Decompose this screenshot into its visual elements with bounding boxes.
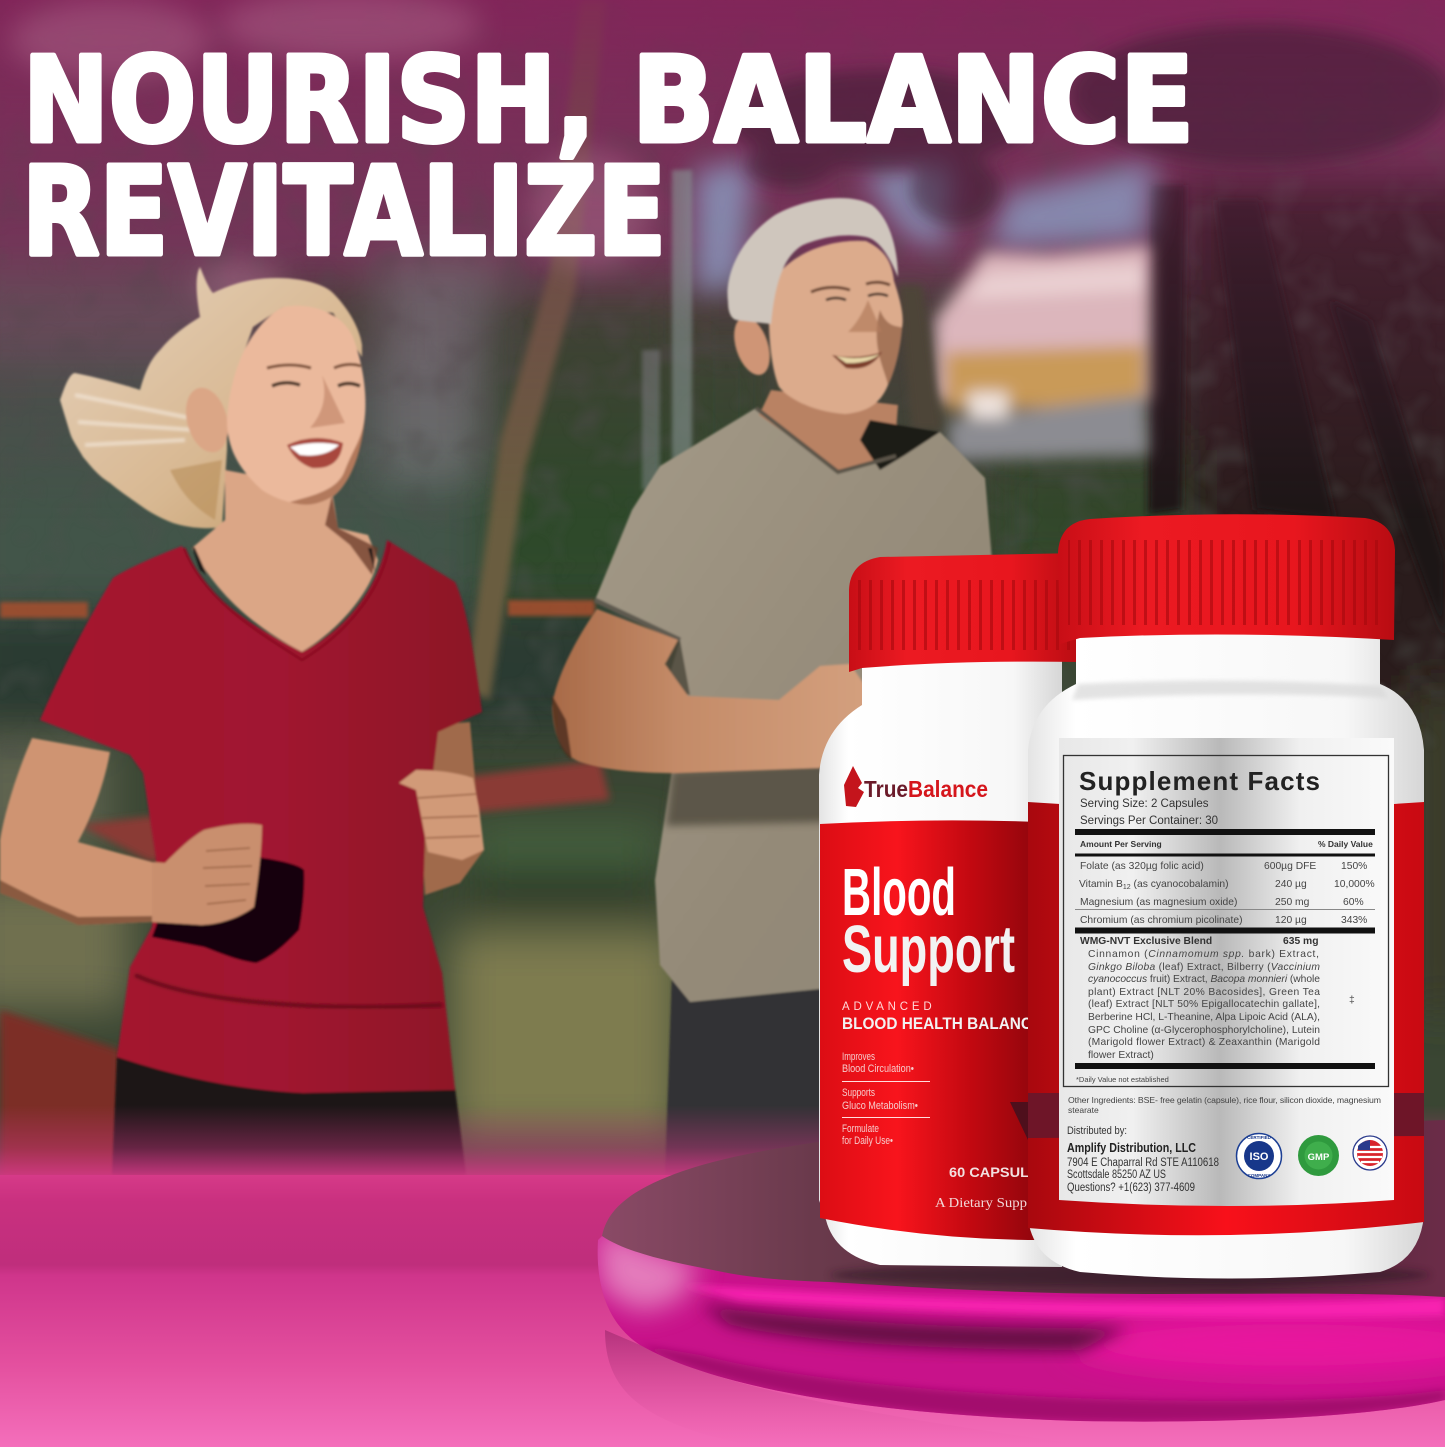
- woman left fist: [152, 824, 262, 925]
- right bottle body: [1028, 632, 1424, 1278]
- distributor info: Distributed by:: [1067, 1125, 1127, 1137]
- product name: [842, 855, 1015, 987]
- woman nose: [310, 375, 345, 428]
- left bottle: [819, 553, 1080, 1267]
- distributor info: Questions? +1(623) 377-4609: [1067, 1182, 1195, 1194]
- ISO badge: CERTIFIED: [1247, 1135, 1272, 1140]
- ISO badge: COMPANY: [1248, 1173, 1270, 1178]
- heading word balance: BALANCE: [632, 31, 1194, 169]
- nutrient rows: 12: [1123, 884, 1131, 891]
- benefits list: for Daily Use•: [842, 1135, 893, 1147]
- exclusive blend: plant) Extract [NLT 20% Bacosides], Green Tea: [1088, 987, 1320, 998]
- exclusive blend: (leaf) Extract [NLT 50% Epigallocatechin gallate],: [1088, 999, 1320, 1010]
- podium top: [602, 1120, 1445, 1297]
- distributor info: [1067, 1125, 1219, 1194]
- serving info: [1080, 798, 1218, 827]
- benefits list: [842, 1051, 930, 1147]
- woman right arm: [420, 722, 484, 895]
- pink fade over photo: [0, 1105, 1445, 1176]
- supplement facts title: Supplement Facts: [1079, 766, 1320, 796]
- exclusive blend: Ginkgo Biloba (leaf) Extract, Bilberry (Vaccinium: [1088, 962, 1320, 973]
- dark band: [1028, 1093, 1424, 1138]
- distributor info: Scottsdale 85250 AZ US: [1067, 1169, 1166, 1181]
- woman hair: [60, 267, 362, 528]
- heading: [22, 31, 1194, 283]
- other ingredients: [1068, 1095, 1381, 1115]
- woman shadow on face: [290, 415, 365, 505]
- nutrient rows: 60%: [1343, 897, 1364, 908]
- woman face: [227, 306, 365, 504]
- woman hand shadow: [152, 857, 304, 963]
- woman shirt fold: [135, 975, 442, 1007]
- podium side: [598, 1236, 1445, 1422]
- dark ribbon: [1010, 1102, 1040, 1150]
- table header: % Daily Value: [1318, 839, 1373, 849]
- brand logo: [844, 766, 988, 807]
- GMP badge: GMP: [1308, 1152, 1330, 1163]
- man t-shirt: [595, 408, 1000, 1002]
- nutrient rows: 343%: [1341, 915, 1367, 926]
- GMP badge: [1298, 1135, 1339, 1176]
- benefits list: Improves: [842, 1051, 875, 1063]
- exclusive blend: WMG-NVT Exclusive Blend: [1080, 936, 1212, 947]
- man under-arm shadow: [666, 762, 830, 826]
- poles and fence: [0, 350, 660, 618]
- man smile: [832, 352, 882, 369]
- woman pants: [112, 1057, 466, 1175]
- man ear: [728, 313, 776, 379]
- woman hair strands: [75, 395, 200, 445]
- pink tree highlights: [10, 0, 650, 310]
- woman right fist: [399, 770, 484, 860]
- other ingredients: stearate: [1068, 1105, 1099, 1115]
- exclusive blend: flower Extract): [1088, 1050, 1154, 1061]
- benefits list: Blood Circulation•: [842, 1063, 914, 1075]
- right bottle red wrap: [1028, 802, 1424, 1235]
- left bottle body: [819, 660, 1062, 1267]
- sky patch: [695, 160, 1155, 295]
- white label panel: [1059, 738, 1394, 1206]
- daily value footnote: *Daily Value not established: [1076, 1075, 1169, 1084]
- benefits list: Gluco Metabolism•: [842, 1100, 918, 1112]
- other ingredients: Other Ingredients: BSE- free gelatin (capsule), rice flour, silicon dioxide, magnesium: [1068, 1095, 1381, 1105]
- woman sports bra strap: [192, 546, 375, 575]
- tree trunk behind man: [898, 285, 942, 430]
- woman collar seam: [184, 542, 390, 660]
- woman left arm: [0, 738, 165, 925]
- logo mark: [844, 766, 864, 807]
- woman brows and eyes: [267, 364, 361, 368]
- benefits list: Supports: [842, 1087, 875, 1099]
- nutrient rows: 250 mg: [1275, 897, 1310, 908]
- heading word nourish: NOURISH,: [23, 31, 595, 169]
- woman red shirt: [40, 540, 482, 1093]
- USA flag badge: [1353, 1136, 1387, 1170]
- exclusive blend: 635 mg: [1283, 936, 1318, 947]
- table header: Amount Per Serving: [1080, 839, 1162, 849]
- nutrient rows: 120 µg: [1275, 915, 1307, 926]
- foliage texture: [0, 0, 1445, 760]
- running track: [80, 760, 610, 862]
- exclusive blend: (Marigold flower Extract) & Zeaxanthin (Marigold: [1088, 1037, 1320, 1048]
- dietary supplement note: A Dietary Supp: [935, 1196, 1027, 1211]
- tree canopy dark leaves: [730, 25, 1445, 225]
- man neck: [759, 390, 898, 470]
- man legs: [665, 972, 835, 1175]
- podium: [596, 1120, 1445, 1447]
- man hair: [728, 198, 898, 324]
- product name: Support: [842, 912, 1015, 987]
- man nose: [848, 300, 882, 332]
- man collar: [756, 408, 896, 472]
- nutrient rows: 240 µg: [1275, 879, 1307, 890]
- left bottle label: [820, 820, 1040, 1240]
- serving info: Servings Per Container: 30: [1080, 815, 1218, 827]
- exclusive blend: Berberine HCl, L-Theanine, Alpa Lipoic Acid (ALA),: [1088, 1012, 1320, 1023]
- nutrient rows: Folate (as 320µg folic acid): [1080, 861, 1204, 872]
- bottle contact shadow: [830, 1263, 1430, 1287]
- man figure: [552, 198, 1000, 1175]
- nutrient rows: 10,000%: [1334, 879, 1375, 890]
- woman neck and chest: [192, 470, 378, 652]
- benefits list: Formulate: [842, 1123, 879, 1135]
- woman ear: [179, 383, 235, 457]
- brand name: TrueBalance: [864, 776, 988, 802]
- shoulder shading: [1072, 680, 1388, 700]
- magenta top overlay: [0, 0, 1445, 520]
- nutrient rows: Vitamin B: [1079, 879, 1123, 890]
- right bottle: [1028, 514, 1424, 1278]
- product tagline: BLOOD HEALTH BALANC: [842, 1014, 1032, 1033]
- tree trunks: [465, 0, 1445, 700]
- light pole: [672, 170, 692, 460]
- man sleeve hem: [595, 600, 680, 640]
- ISO badge: ISO: [1250, 1151, 1269, 1163]
- man arm: [552, 609, 868, 773]
- heading line 2: REVITALIZE: [22, 141, 666, 283]
- supplement facts box: [1064, 756, 1388, 1086]
- man face: [769, 241, 903, 414]
- serving info: Serving Size: 2 Capsules: [1080, 798, 1209, 810]
- nutrient rows: 600µg DFE: [1264, 861, 1316, 872]
- distant building: [935, 245, 1150, 460]
- woman smile: [287, 438, 343, 468]
- nutrient rows: 150%: [1341, 861, 1367, 872]
- nutrient rows: (as cyanocobalamin): [1131, 879, 1229, 890]
- ISO badge: [1236, 1134, 1282, 1178]
- table header: [1080, 839, 1373, 849]
- pink floor: [0, 1175, 1445, 1447]
- product tagline: [842, 1001, 1032, 1033]
- woman figure: [0, 267, 484, 1175]
- product tagline: ADVANCED: [842, 1001, 935, 1013]
- nutrient rows: Magnesium (as magnesium oxide): [1080, 897, 1237, 908]
- capsule count: 60 CAPSUL: [949, 1164, 1029, 1180]
- nutrient rows: Chromium (as chromium picolinate): [1080, 915, 1243, 926]
- man eyes and brows: [811, 282, 890, 292]
- nutrient rows: [1075, 861, 1375, 926]
- distributor info: 7904 E Chaparral Rd STE A110618: [1067, 1157, 1219, 1169]
- podium floor shadow: [605, 1330, 1100, 1447]
- right bottle cap: [1058, 514, 1395, 644]
- product name: Blood: [842, 855, 956, 930]
- exclusive blend: ‡: [1349, 995, 1355, 1006]
- exclusive blend: [1080, 936, 1355, 1061]
- left bottle cap: [849, 553, 1080, 672]
- podium side lighting: [596, 1225, 1445, 1422]
- exclusive blend: Cinnamon (Cinnamomum spp. bark) Extract,: [1088, 949, 1319, 960]
- exclusive blend: GPC Choline (α-Glycerophosphorylcholine), Lutein: [1088, 1025, 1320, 1036]
- exclusive blend: cyanococcus fruit) Extract, Bacopa monnieri (whole: [1088, 974, 1320, 985]
- distributor info: Amplify Distribution, LLC: [1067, 1140, 1196, 1155]
- man shadowed cheek: [877, 310, 902, 385]
